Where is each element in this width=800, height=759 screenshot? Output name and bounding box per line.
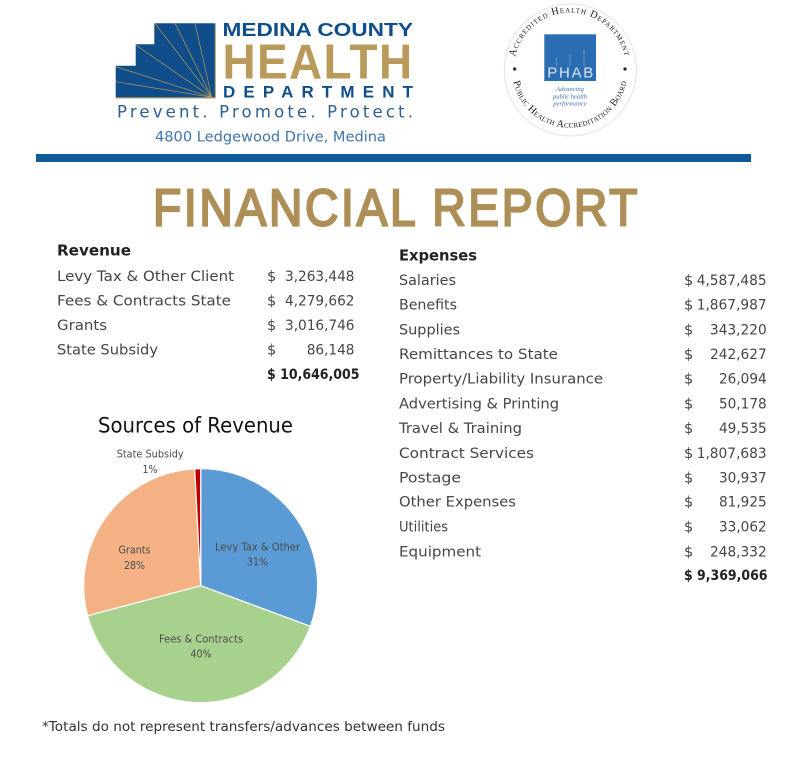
- expense rows: $: [684, 396, 693, 412]
- expense rows: 1,807,683: [697, 446, 767, 462]
- pie labels: Levy Tax & Other: [215, 542, 301, 554]
- expense rows: $: [684, 446, 693, 462]
- pie chart: sources of revenue: [84, 449, 318, 703]
- PHAB motto: public health: [552, 93, 587, 100]
- expense rows: Advertising & Printing: [399, 396, 559, 412]
- divider bar: [36, 154, 751, 162]
- expense rows: 4,587,485: [697, 273, 767, 289]
- expense rows: Contract Services: [399, 446, 534, 462]
- revenue total: $ 10,646,005: [267, 367, 360, 383]
- pie labels: 28%: [124, 560, 145, 572]
- PHAB blue square: PHAB: [547, 65, 593, 82]
- slice: levy tax: [201, 469, 318, 626]
- slice: state subsidy: [195, 469, 201, 586]
- slice: fees and contracts: [88, 586, 310, 703]
- revenue rows: 3,016,746: [285, 318, 354, 334]
- expense rows: 33,062: [719, 520, 767, 536]
- expense rows: $: [684, 421, 693, 437]
- panel: expenses: [398, 246, 768, 584]
- expense rows: 49,535: [719, 421, 767, 437]
- logo text: Department: DEPARTMENT: [223, 82, 414, 101]
- revenue rows: [57, 269, 354, 358]
- expense rows: 343,220: [710, 322, 767, 338]
- revenue rows: $: [267, 294, 276, 310]
- expense rows: Other Expenses: [399, 495, 516, 511]
- revenue rows: $: [267, 318, 276, 334]
- revenue rows: 4,279,662: [285, 294, 354, 310]
- expense rows: 50,178: [719, 396, 767, 412]
- revenue rows: $: [267, 269, 276, 285]
- pie labels: Grants: [118, 545, 150, 557]
- address: 4800 Ledgewood Drive, Medina: [155, 130, 386, 146]
- expense rows: 242,627: [710, 347, 767, 363]
- expense rows: [398, 273, 767, 560]
- revenue rows: Levy Tax & Other Client: [57, 269, 234, 285]
- expenses heading: Expenses: [399, 246, 477, 264]
- expense rows: Equipment: [399, 544, 481, 560]
- expense rows: Salaries: [399, 273, 456, 289]
- expense rows: $: [684, 520, 693, 536]
- pie labels: State Subsidy: [117, 449, 184, 461]
- slice: grants: [84, 469, 201, 616]
- revenue rows: 3,263,448: [285, 269, 354, 285]
- pie labels: [117, 449, 301, 661]
- revenue rows: State Subsidy: [57, 342, 158, 358]
- expense rows: 248,332: [710, 544, 767, 560]
- pie labels: 40%: [190, 649, 212, 661]
- expenses total: $ 9,369,066: [684, 568, 768, 584]
- revenue rows: Fees & Contracts State: [57, 294, 231, 310]
- pie labels: 31%: [247, 557, 268, 569]
- expense rows: 26,094: [719, 371, 767, 387]
- expense rows: $: [684, 495, 693, 511]
- logo tagline: Prevent. Promote. Protect.: [117, 102, 413, 121]
- expense rows: Supplies: [399, 322, 460, 338]
- panel: revenue: [57, 242, 360, 383]
- expense rows: Travel & Training: [398, 421, 522, 437]
- expense rows: Remittances to State: [399, 347, 558, 363]
- expense rows: Benefits: [399, 298, 457, 314]
- expense rows: $: [684, 371, 693, 387]
- revenue heading: Revenue: [57, 242, 131, 260]
- logo text: Health: HEALTH: [222, 35, 414, 89]
- footnote: *Totals do not represent transfers/advances between funds: [42, 720, 445, 735]
- logo text: Medina County: MEDINA COUNTY: [222, 19, 413, 40]
- expense rows: $: [684, 273, 693, 289]
- title: FINANCIAL REPORT: [153, 179, 640, 237]
- expense rows: $: [684, 347, 693, 363]
- expense rows: 30,937: [719, 470, 767, 486]
- expense rows: 81,925: [719, 495, 767, 511]
- pie labels: Fees & Contracts: [159, 634, 243, 646]
- seal top text: Accredited Health Department: [509, 7, 630, 57]
- PHAB motto: Advancing: [555, 86, 585, 93]
- revenue rows: $: [267, 342, 276, 358]
- expense rows: Utilities: [399, 520, 448, 536]
- chart title: Sources of Revenue: [98, 414, 293, 438]
- expense rows: Property/Liability Insurance: [399, 371, 603, 387]
- expense rows: 1,867,987: [697, 298, 767, 314]
- seal: PHAB accreditation: [504, 4, 637, 136]
- pie labels: 1%: [142, 464, 158, 476]
- revenue rows: Grants: [57, 318, 107, 334]
- expense rows: $: [684, 322, 693, 338]
- icon: stepped sunburst: [116, 23, 215, 98]
- PHAB motto: [552, 86, 587, 108]
- expense rows: $: [684, 544, 693, 560]
- logo: Medina County Health Department: [116, 19, 414, 146]
- expense rows: Postage: [399, 470, 461, 486]
- expense rows: $: [684, 470, 693, 486]
- revenue rows: 86,148: [307, 342, 354, 358]
- seal bottom text: Public Health Accreditation Board: [514, 80, 626, 128]
- PHAB motto: performance: [552, 100, 587, 108]
- expense rows: $: [684, 298, 693, 314]
